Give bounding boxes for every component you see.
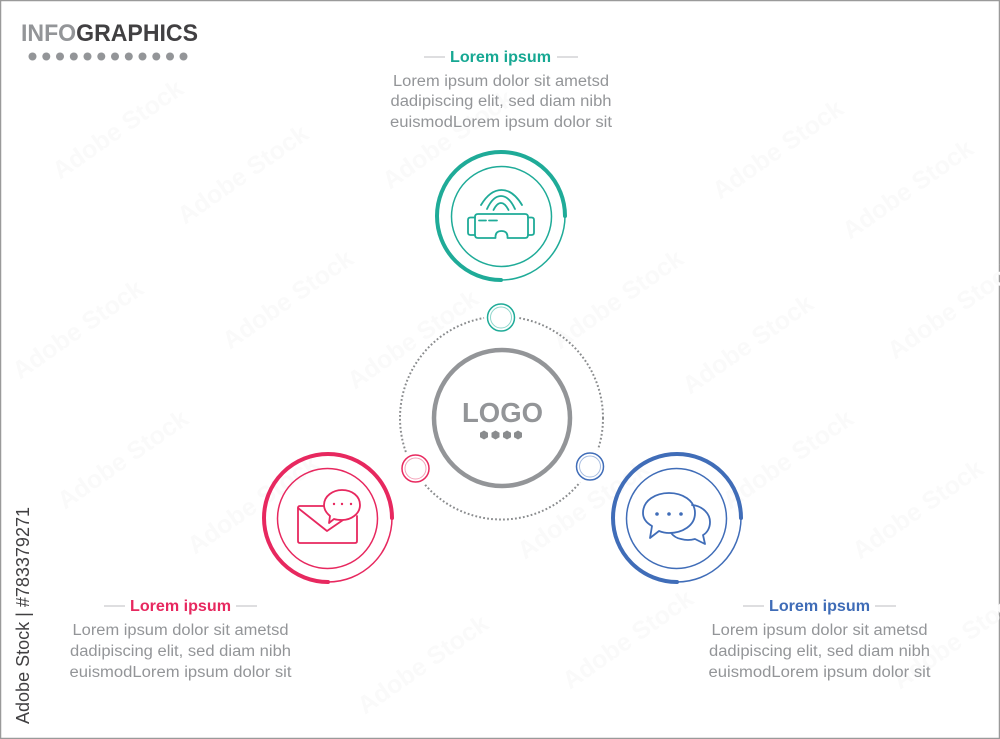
text block: top teal: Lorem ipsum dolor sit ametsd [393,73,609,90]
stock credit vertical text: Adobe Stock | #783379271 [13,507,33,724]
text block: top teal: Lorem ipsum [450,49,551,66]
text: Adobe Stock [847,454,989,565]
text block: top teal: euismodLorem ipsum dolor sit [390,114,613,131]
text: Adobe Stock [7,274,149,385]
panel: central logo with dotted ring [400,316,603,520]
text: Adobe Stock [52,404,194,515]
icon: VR headset with signal [468,190,534,238]
icon: envelope with speech bubble [298,490,360,543]
text: Adobe Stock [547,244,689,355]
text: Adobe Stock [377,84,519,195]
node: teal [484,300,518,334]
text block: pink [70,598,292,681]
text: Adobe Stock [837,134,979,245]
text: Adobe Stock [677,289,819,400]
text block: top teal [390,49,613,131]
text: Adobe Stock [172,119,314,230]
node: pink [396,450,434,488]
text block: top teal: dadipiscing elit, sed diam nibh [390,93,612,110]
text: Adobe Stock [512,454,654,565]
text block: pink: Lorem ipsum [130,598,231,615]
text: Adobe Stock [342,284,484,395]
text block: blue: dadipiscing elit, sed diam nibh [709,643,930,660]
text block: blue: Lorem ipsum [769,598,870,615]
text block: blue: Lorem ipsum dolor sit ametsd [712,622,928,639]
text: Adobe Stock [47,74,189,185]
text block: pink: dadipiscing elit, sed diam nibh [70,643,291,660]
panel: pink mail circle [264,454,392,582]
text: Adobe Stock [182,449,324,560]
node: blue [571,448,609,486]
title: infographics [21,20,198,60]
text: Adobe Stock [707,94,849,205]
text block: pink: euismodLorem ipsum dolor sit [70,664,292,681]
text block: pink: Lorem ipsum dolor sit ametsd [72,622,288,639]
panel: blue chat circle [613,454,741,582]
text: Adobe Stock [352,609,494,720]
text: Adobe Stock [717,404,859,515]
icon: chat bubbles [643,493,710,544]
panel: central logo with dotted ring: LOGO [462,397,543,428]
title: infographics: INFOGRAPHICS [21,20,198,47]
panel: teal VR headset circle [437,152,565,280]
text block: blue: euismodLorem ipsum dolor sit [708,664,931,681]
text: Adobe Stock [217,244,359,355]
text: Adobe Stock [557,584,699,695]
text block: blue [708,598,931,681]
